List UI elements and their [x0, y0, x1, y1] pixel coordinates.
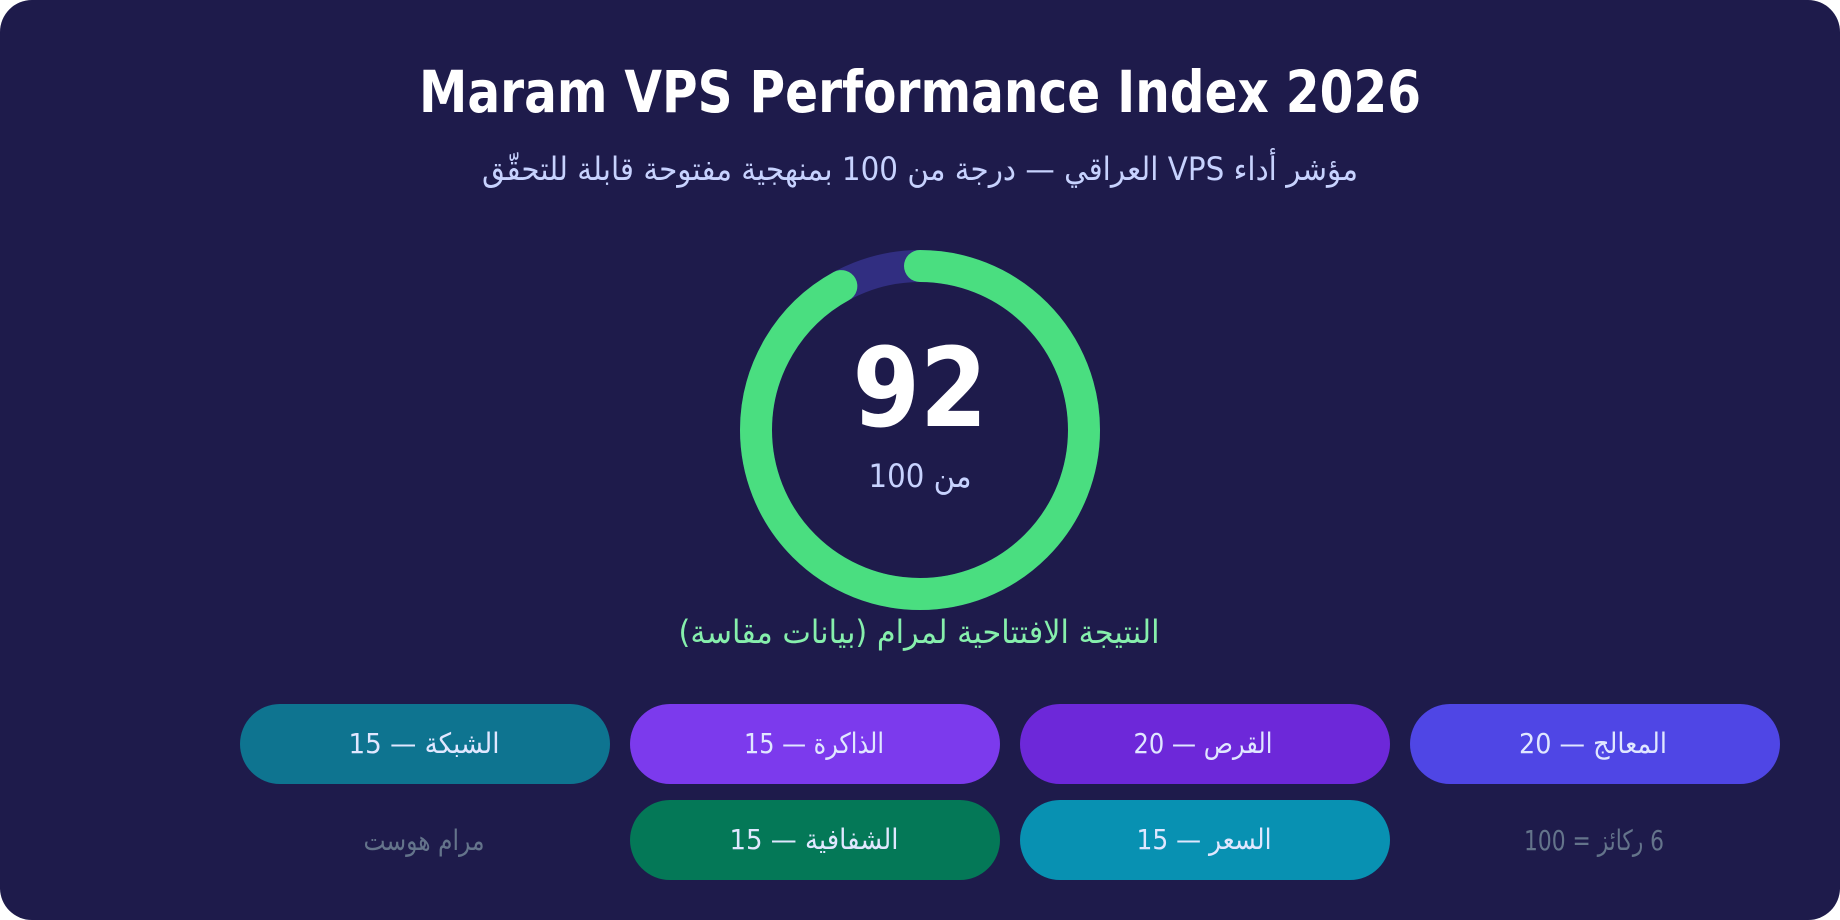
pill: CPU 20 — [1410, 704, 1780, 784]
gauge track — [756, 266, 1084, 594]
pill: transparency 15 — [630, 800, 1000, 880]
pill: memory 15 — [630, 704, 1000, 784]
pill: price 15 — [1020, 800, 1390, 880]
score scale label: من 100 — [868, 457, 972, 495]
gauge progress arc: 92 percent — [756, 266, 1084, 594]
pill: memory 15: الذاكرة — 15 — [744, 727, 884, 760]
pill: CPU 20: المعالج — 20 — [1519, 727, 1667, 760]
pill: transparency 15: الشفافية — 15 — [730, 823, 898, 856]
pill: network 15 — [240, 704, 610, 784]
note: six pillars total: 6 ركائز = 100 — [1524, 824, 1664, 857]
title: Maram VPS Performance Index 2026 — [419, 58, 1421, 126]
subtitle: مؤشر أداء VPS العراقي — درجة من 100 بمنهجية مفتوحة قابلة للتحقّق — [482, 148, 1358, 188]
pill: disk 20: القرص — 20 — [1134, 727, 1272, 760]
score value: 92 — [852, 324, 988, 452]
score gauge — [756, 266, 1084, 594]
pill: price 15: السعر — 15 — [1136, 823, 1272, 856]
pill: network 15: الشبكة — 15 — [349, 727, 500, 760]
note: brand name: مرام هوست — [364, 824, 484, 857]
score caption: النتيجة الافتتاحية لمرام (بيانات مقاسة) — [678, 613, 1160, 651]
pill: disk 20 — [1020, 704, 1390, 784]
